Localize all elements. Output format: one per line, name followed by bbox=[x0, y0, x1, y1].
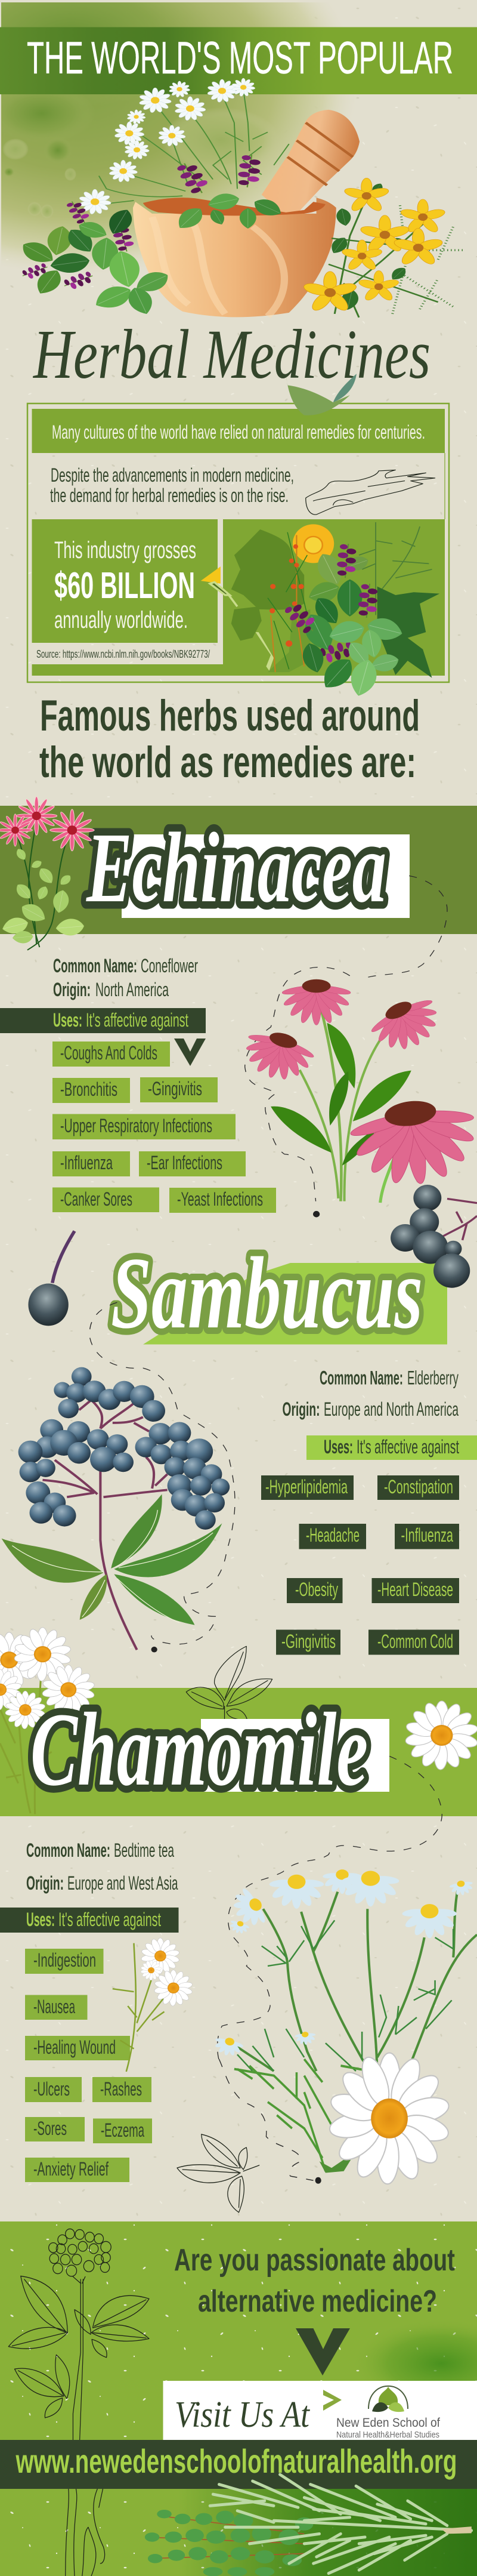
text block: chamomile facts: Common Name: bbox=[26, 1839, 110, 1861]
illustration: panel leaf, root and herb bouquet bbox=[201, 374, 439, 699]
chamomile flowers bbox=[139, 88, 172, 113]
text: visit us at: Visit Us At bbox=[175, 2395, 311, 2435]
illustration: mortar, pestle and herbs bbox=[17, 78, 466, 318]
illustration: ginseng sketch bbox=[8, 2229, 149, 2440]
text block: sambucus facts: Origin: bbox=[283, 1398, 320, 1420]
website band bbox=[0, 2440, 477, 2489]
text block: chamomile facts: Europe and West Asia bbox=[67, 1872, 178, 1894]
uses bar: sambucus bbox=[306, 1435, 477, 1460]
flowers bbox=[281, 979, 351, 1025]
list: echinacea ailments: -Canker Sores bbox=[60, 1188, 132, 1210]
list: echinacea ailments: -Bronchitis bbox=[60, 1079, 117, 1100]
arrow: dashed trail bbox=[245, 876, 447, 1217]
large bouquet leaves bbox=[231, 529, 304, 610]
stat: 60 billion: annually worldwide. bbox=[54, 607, 188, 633]
bouquet rushes bbox=[271, 535, 304, 672]
right daisy bbox=[404, 1701, 477, 1770]
chevron bbox=[296, 2328, 350, 2375]
arrow: dashed trail bbox=[89, 1302, 235, 1652]
list: echinacea ailments: -Ear Infections bbox=[147, 1152, 222, 1173]
list: sambucus ailments bbox=[261, 1475, 459, 1654]
big daisy bbox=[328, 2053, 451, 2184]
bouquet leaves bbox=[312, 550, 348, 589]
uses bar: chamomile: It's affective against bbox=[58, 1909, 161, 1930]
arrow: dashed trail bbox=[219, 2059, 321, 2184]
berry clusters bbox=[18, 1367, 230, 1530]
uses bar: echinacea: Uses: bbox=[53, 1009, 82, 1031]
leaves bbox=[327, 1023, 355, 1089]
list: sambucus ailments: -Hyperlipidemia bbox=[265, 1476, 348, 1497]
text block: sambucus facts: Common Name: bbox=[320, 1367, 403, 1388]
text block: sambucus facts bbox=[283, 1367, 459, 1420]
plant lower stems bbox=[234, 2059, 377, 2171]
top right berries bbox=[391, 1185, 477, 1288]
text block: echinacea facts: Origin: bbox=[53, 979, 91, 1000]
left leaf cluster bbox=[103, 207, 137, 238]
large dandelion bbox=[293, 524, 334, 563]
illustration: small chamomile sprig bbox=[113, 1938, 193, 2072]
list: chamomile ailments: -Anxiety Relief bbox=[33, 2158, 109, 2180]
stems bbox=[42, 1394, 168, 1650]
icon: root sketch bbox=[306, 470, 435, 514]
text block: echinacea facts: North America bbox=[95, 979, 169, 1000]
bouquet stems and back fern bbox=[359, 522, 432, 615]
text block: echinacea facts bbox=[53, 955, 198, 1000]
text block: chamomile facts bbox=[26, 1839, 178, 1894]
watercolor stain bbox=[0, 0, 358, 275]
list: chamomile ailments: -Healing Wound bbox=[33, 2036, 116, 2058]
mortar bowl bbox=[133, 198, 336, 317]
panel: sambucus banner bbox=[111, 1237, 447, 1350]
heading: famous herbs bbox=[39, 692, 420, 787]
chamomile heading block bbox=[30, 1691, 389, 1808]
thyme sprigs bbox=[145, 2510, 314, 2576]
illustration: chamomile plant bbox=[212, 1869, 477, 2080]
text block: chamomile facts: Origin: bbox=[26, 1872, 64, 1894]
panel: echinacea banner bbox=[0, 806, 477, 934]
list: chamomile ailments: -Nausea bbox=[33, 1996, 75, 2017]
text block: despite the advancements: the demand for herbal remedies is on the rise. bbox=[50, 485, 289, 506]
arrow bbox=[323, 2390, 342, 2411]
list: chamomile ailments: -Eczema bbox=[101, 2119, 144, 2141]
list: echinacea ailments bbox=[52, 1042, 276, 1213]
uses bar: echinacea bbox=[0, 1008, 206, 1033]
list: echinacea ailments: -Coughs And Colds bbox=[60, 1042, 157, 1064]
uses bar: echinacea: It's affective against bbox=[86, 1009, 188, 1031]
illustration: elderberries bbox=[2, 1185, 477, 1652]
list: echinacea ailments: -Upper Respiratory Infections bbox=[60, 1115, 212, 1136]
bowl herb leaves bbox=[172, 204, 208, 233]
green image block bbox=[32, 519, 445, 676]
chamomile stems bbox=[95, 90, 289, 208]
text block: echinacea facts: Coneflower bbox=[141, 955, 198, 976]
stat: 60 billion: This industry grosses bbox=[54, 537, 196, 563]
pestle bbox=[262, 110, 360, 214]
icon: sketch leaves bbox=[177, 2134, 259, 2213]
panel: industry overview bbox=[27, 403, 449, 682]
list: echinacea ailments: -Yeast Infections bbox=[177, 1188, 263, 1210]
stat: 60 billion bbox=[32, 519, 218, 643]
illustration: big daisy, sketch leaves and trail end bbox=[177, 2053, 451, 2213]
logo: new eden school bbox=[336, 2386, 440, 2440]
text block: chamomile facts: Bedtime tea bbox=[114, 1839, 174, 1861]
text block: despite the advancements bbox=[50, 453, 445, 519]
list: sambucus ailments: -Obesity bbox=[295, 1579, 338, 1600]
uses bar: chamomile: Uses: bbox=[26, 1909, 55, 1930]
leaves bbox=[111, 1495, 162, 1569]
list: chamomile ailments bbox=[25, 1949, 152, 2182]
list: chamomile ailments: -Rashes bbox=[100, 2078, 142, 2100]
heading: are you passionate bbox=[174, 2243, 455, 2319]
list: echinacea ailments: -Gingivitis bbox=[148, 1078, 202, 1099]
illustration: thyme and rosemary bbox=[145, 2475, 472, 2576]
yellow flowers bbox=[343, 178, 390, 213]
illustration: echinacea plant and dashed trail bbox=[237, 876, 477, 1217]
panel: chamomile banner bbox=[0, 1688, 477, 1816]
small dandelion bbox=[201, 566, 237, 606]
panel border bbox=[27, 403, 449, 682]
stems bbox=[300, 1009, 398, 1203]
source note: Source: https://www.ncbi.nlm.nih.gov/books/NBK92773/ bbox=[36, 648, 210, 660]
icon: tea leaf sketch bbox=[186, 1646, 272, 1725]
illustration: ginseng root bbox=[66, 2489, 105, 2576]
arrow: dashed trail bbox=[217, 1756, 442, 2066]
illustration: chamomile banner flowers bbox=[0, 1628, 477, 2066]
list: echinacea ailments: -Influenza bbox=[60, 1152, 113, 1173]
sage spikes bbox=[175, 160, 212, 196]
text block: despite the advancements: Despite the advancements in modern medicine, bbox=[51, 464, 294, 486]
list: sambucus ailments: -Headache bbox=[306, 1524, 360, 1546]
logo: new eden school: Natural Health&Herbal Studies bbox=[336, 2430, 439, 2440]
illustration: echinacea small plant bbox=[0, 797, 94, 950]
left chamomile sprig bbox=[0, 1672, 52, 1814]
list: chamomile ailments: -Sores bbox=[33, 2118, 67, 2139]
list: chamomile ailments: -Indigestion bbox=[33, 1949, 96, 1971]
stat: 60 billion: $60 BILLION bbox=[54, 565, 195, 606]
title band bbox=[0, 27, 477, 94]
text block: many cultures bbox=[32, 409, 445, 453]
St John's wort stems bbox=[329, 201, 438, 318]
uses bar: sambucus: Uses: bbox=[324, 1436, 353, 1458]
list: sambucus ailments: -Gingivitis bbox=[281, 1631, 336, 1652]
text block: echinacea facts: Common Name: bbox=[53, 955, 137, 976]
single berry bbox=[28, 1231, 75, 1326]
logo: new eden school: New Eden School of bbox=[336, 2416, 440, 2430]
panel: call to action bbox=[0, 2221, 477, 2576]
uses bar: chamomile bbox=[0, 1908, 179, 1933]
list: chamomile ailments: -Ulcers bbox=[33, 2078, 70, 2100]
chevron: echinacea bbox=[174, 1039, 206, 1066]
panel: visit us at bbox=[163, 2381, 477, 2440]
rosemary sprig bbox=[210, 2475, 472, 2574]
icon: watercolor leaf bbox=[286, 374, 357, 415]
